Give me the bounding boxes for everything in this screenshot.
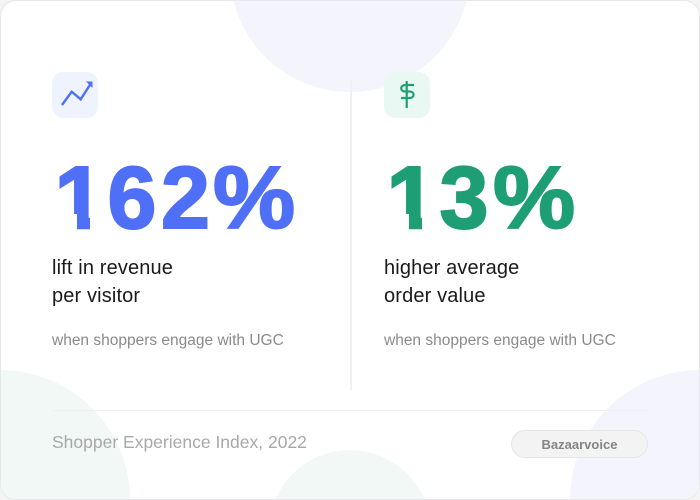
stat: 162% bbox=[55, 148, 295, 246]
footer divider bbox=[52, 410, 649, 411]
note: right: when shoppers engage with UGC bbox=[384, 332, 616, 349]
icon: trending up chart bbox=[52, 72, 98, 118]
column divider bbox=[350, 80, 352, 390]
stat: 162%: % bbox=[213, 148, 295, 246]
label: lift in revenue per visitor: per visitor bbox=[52, 285, 140, 307]
brand pill: Bazaarvoice bbox=[542, 437, 617, 452]
label: higher average order value bbox=[384, 257, 519, 307]
stat: 13%: 1 bbox=[387, 148, 436, 246]
stat: 162%: 2 bbox=[161, 148, 210, 246]
stat: 162%: 1 bbox=[55, 148, 104, 246]
stat: 13% bbox=[387, 148, 575, 246]
source: Shopper Experience Index, 2022 bbox=[52, 432, 307, 452]
label: higher average order value: order value bbox=[384, 285, 486, 307]
stat: 13%: % bbox=[492, 148, 575, 246]
label: lift in revenue per visitor: lift in revenue bbox=[52, 257, 173, 279]
stat: 162%: 6 bbox=[108, 148, 156, 246]
label: higher average order value: higher average bbox=[384, 257, 519, 279]
note: left: when shoppers engage with UGC bbox=[52, 332, 284, 349]
icon: dollar sign bbox=[384, 72, 430, 118]
stat: 13%: 3 bbox=[440, 148, 488, 246]
brand pill bbox=[511, 430, 648, 458]
label: lift in revenue per visitor bbox=[52, 257, 173, 307]
